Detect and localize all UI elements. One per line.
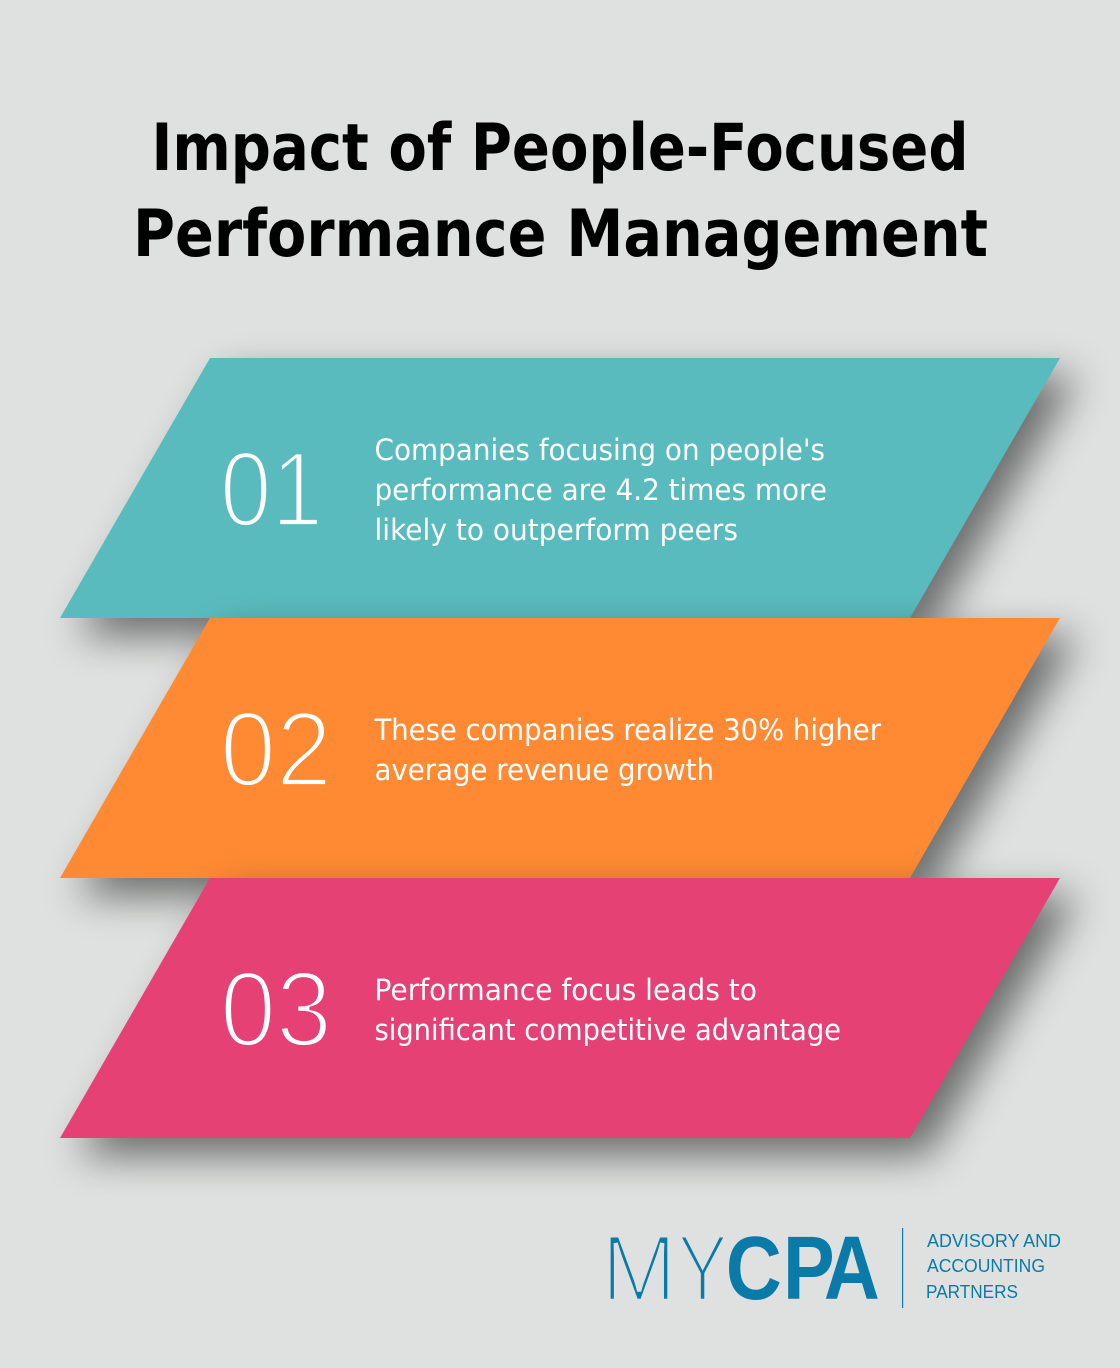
text block 02 xyxy=(374,713,881,787)
logo wordmark MY: Y xyxy=(677,1215,728,1322)
text block 03 xyxy=(374,973,841,1047)
text block 03: significant competitive advantage xyxy=(374,1013,841,1047)
logo wordmark CPA: CPA xyxy=(726,1218,880,1318)
number 03: 03 xyxy=(220,949,332,1069)
text block 01 xyxy=(374,433,827,547)
logo divider xyxy=(902,1228,903,1308)
number 02: 02 xyxy=(220,689,332,809)
teal parallelogram xyxy=(60,358,1060,618)
panel: 02 xyxy=(60,618,1060,878)
text block 02: average revenue growth xyxy=(374,753,714,787)
logo tagline: PARTNERS xyxy=(926,1281,1018,1302)
text block 01: likely to outperform peers xyxy=(374,513,738,547)
text block 03: Performance focus leads to xyxy=(374,973,757,1007)
text block 02: These companies realize 30% higher xyxy=(374,713,881,747)
logo wordmark MY: M xyxy=(601,1214,677,1322)
title: Performance Management xyxy=(133,197,988,272)
title xyxy=(133,111,988,272)
text block 01: performance are 4.2 times more xyxy=(374,473,827,507)
orange parallelogram xyxy=(60,618,1060,878)
logo tagline: ADVISORY AND xyxy=(927,1230,1061,1251)
pink parallelogram xyxy=(60,878,1060,1138)
logo tagline xyxy=(926,1230,1061,1302)
logo tagline: ACCOUNTING xyxy=(927,1255,1045,1276)
number 01: 01 xyxy=(220,429,323,549)
text block 01: Companies focusing on people's xyxy=(374,433,825,467)
panel: 03 xyxy=(60,878,1060,1138)
title: Impact of People-Focused xyxy=(152,111,968,186)
logo wordmark MY xyxy=(601,1214,728,1322)
logo: MYCPA xyxy=(601,1214,1061,1322)
panel: 01 xyxy=(60,358,1060,618)
